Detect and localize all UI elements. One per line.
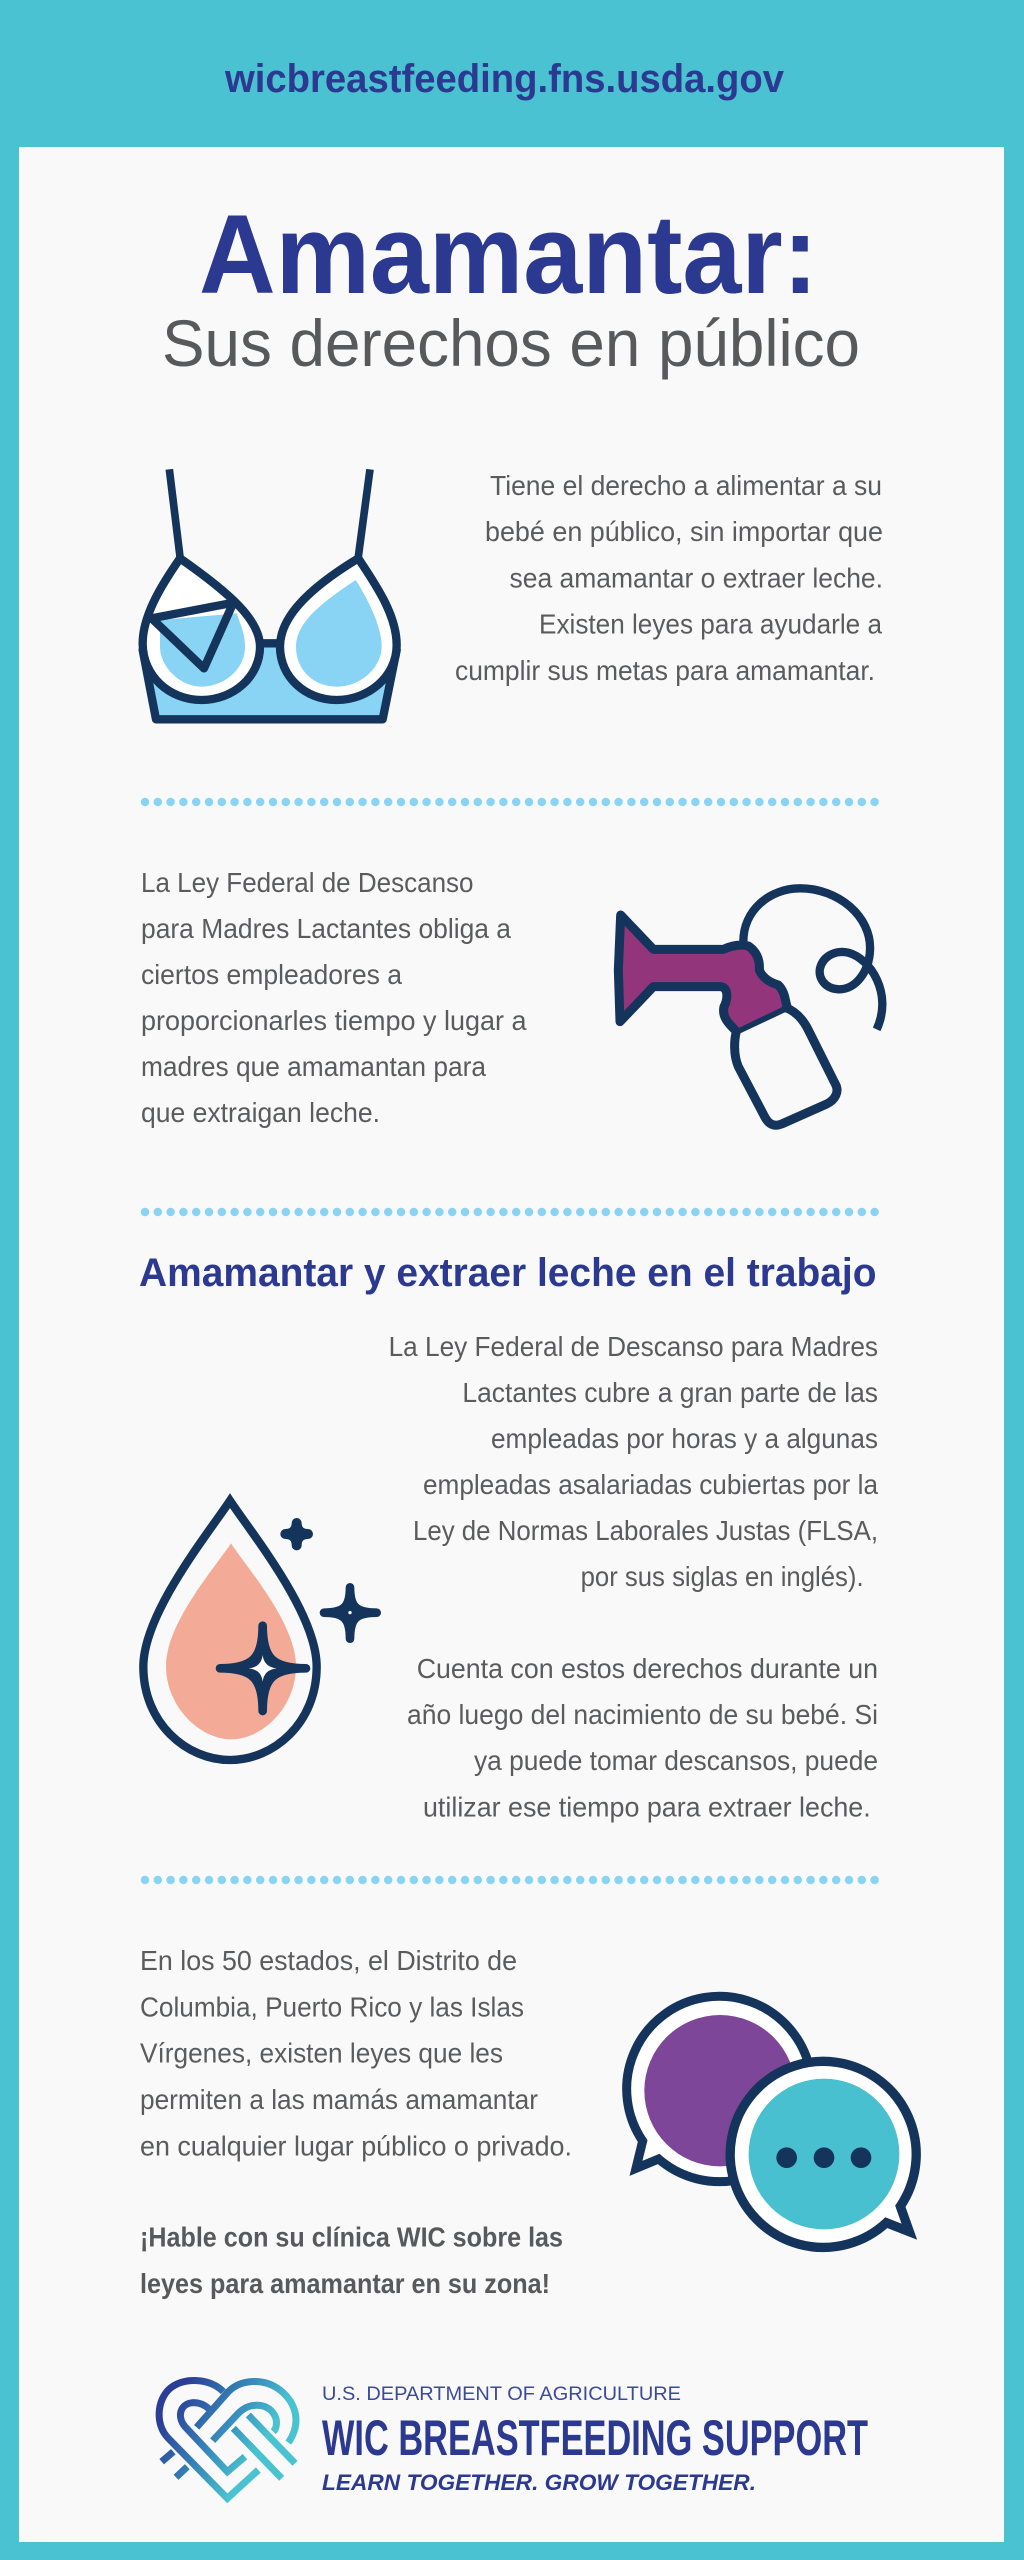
text block: federal break law: ciertos empleadores a [141,959,402,990]
icon: nursing bra [143,469,397,719]
icon: milk drop with sparkles [143,1501,377,1760]
text block: right to feed in public: bebé en público, sin importar que [485,516,883,547]
text block: duration of rights: Cuenta con estos derechos durante un [417,1653,878,1684]
logo: department line: U.S. DEPARTMENT OF AGRICULTURE [322,2384,681,2405]
text block: right to feed in public: sea amamantar o extraer leche. [510,562,883,594]
text block: law coverage: empleadas asalariadas cubiertas por la [423,1469,878,1500]
text block: law coverage: por sus siglas en inglés). [581,1561,864,1592]
text block: laws in all states: Vírgenes, existen leyes que les [140,2038,503,2069]
text block: right to feed in public: Tiene el derecho a alimentar a su [490,470,882,501]
text block: law coverage: empleadas por horas y a algunas [491,1423,878,1454]
text block: right to feed in public: cumplir sus metas para amamantar. [455,655,875,686]
icon: breast pump [618,888,882,1125]
callout: talk to your WIC clinic [140,2222,563,2299]
text block: law coverage: La Ley Federal de Descanso para Madres [389,1331,878,1362]
text block: laws in all states: en cualquier lugar público o privado. [140,2130,572,2161]
callout: talk to your WIC clinic: leyes para amamantar en su zona! [140,2268,550,2299]
text block: law coverage [389,1331,878,1592]
title: Amamantar: [199,192,818,317]
text block: law coverage: Ley de Normas Laborales Justas (FLSA, [413,1515,878,1546]
text block: laws in all states: En los 50 estados, el Distrito de [140,1945,517,1976]
heading: work section: Amamantar y extraer leche en el trabajo [139,1251,876,1295]
logo: tagline: LEARN TOGETHER. GROW TOGETHER. [322,2470,756,2495]
text block: federal break law: proporcionarles tiempo y lugar a [141,1005,527,1036]
text block: laws in all states [140,1945,572,2161]
text block: laws in all states: permiten a las mamás amamantar [140,2084,538,2115]
callout: talk to your WIC clinic: ¡Hable con su clínica WIC sobre las [140,2222,563,2253]
text block: duration of rights: utilizar ese tiempo para extraer leche. [423,1792,871,1823]
text block: federal break law [141,867,527,1128]
text block: federal break law: para Madres Lactantes obliga a [141,913,511,944]
text block: right to feed in public: Existen leyes para ayudarle a [539,608,882,640]
subtitle: Sus derechos en público [162,306,860,380]
icon: speech bubbles [627,1996,916,2247]
text block: federal break law: que extraigan leche. [141,1097,380,1128]
text block: duration of rights: ya puede tomar descansos, puede [474,1745,878,1776]
logo: WIC breastfeeding support [159,2381,868,2498]
text block: duration of rights [407,1653,878,1823]
text block: federal break law: madres que amamantan para [141,1051,486,1082]
text block: law coverage: Lactantes cubre a gran parte de las [462,1377,878,1408]
text block: right to feed in public [455,470,883,686]
website url: wicbreastfeeding.fns.usda.gov [224,57,785,101]
text block: laws in all states: Columbia, Puerto Rico y las Islas [140,1992,524,2022]
text block: duration of rights: año luego del nacimiento de su bebé. Si [407,1699,878,1730]
text block: federal break law: La Ley Federal de Descanso [141,867,474,898]
logo: woven heart [159,2381,296,2498]
